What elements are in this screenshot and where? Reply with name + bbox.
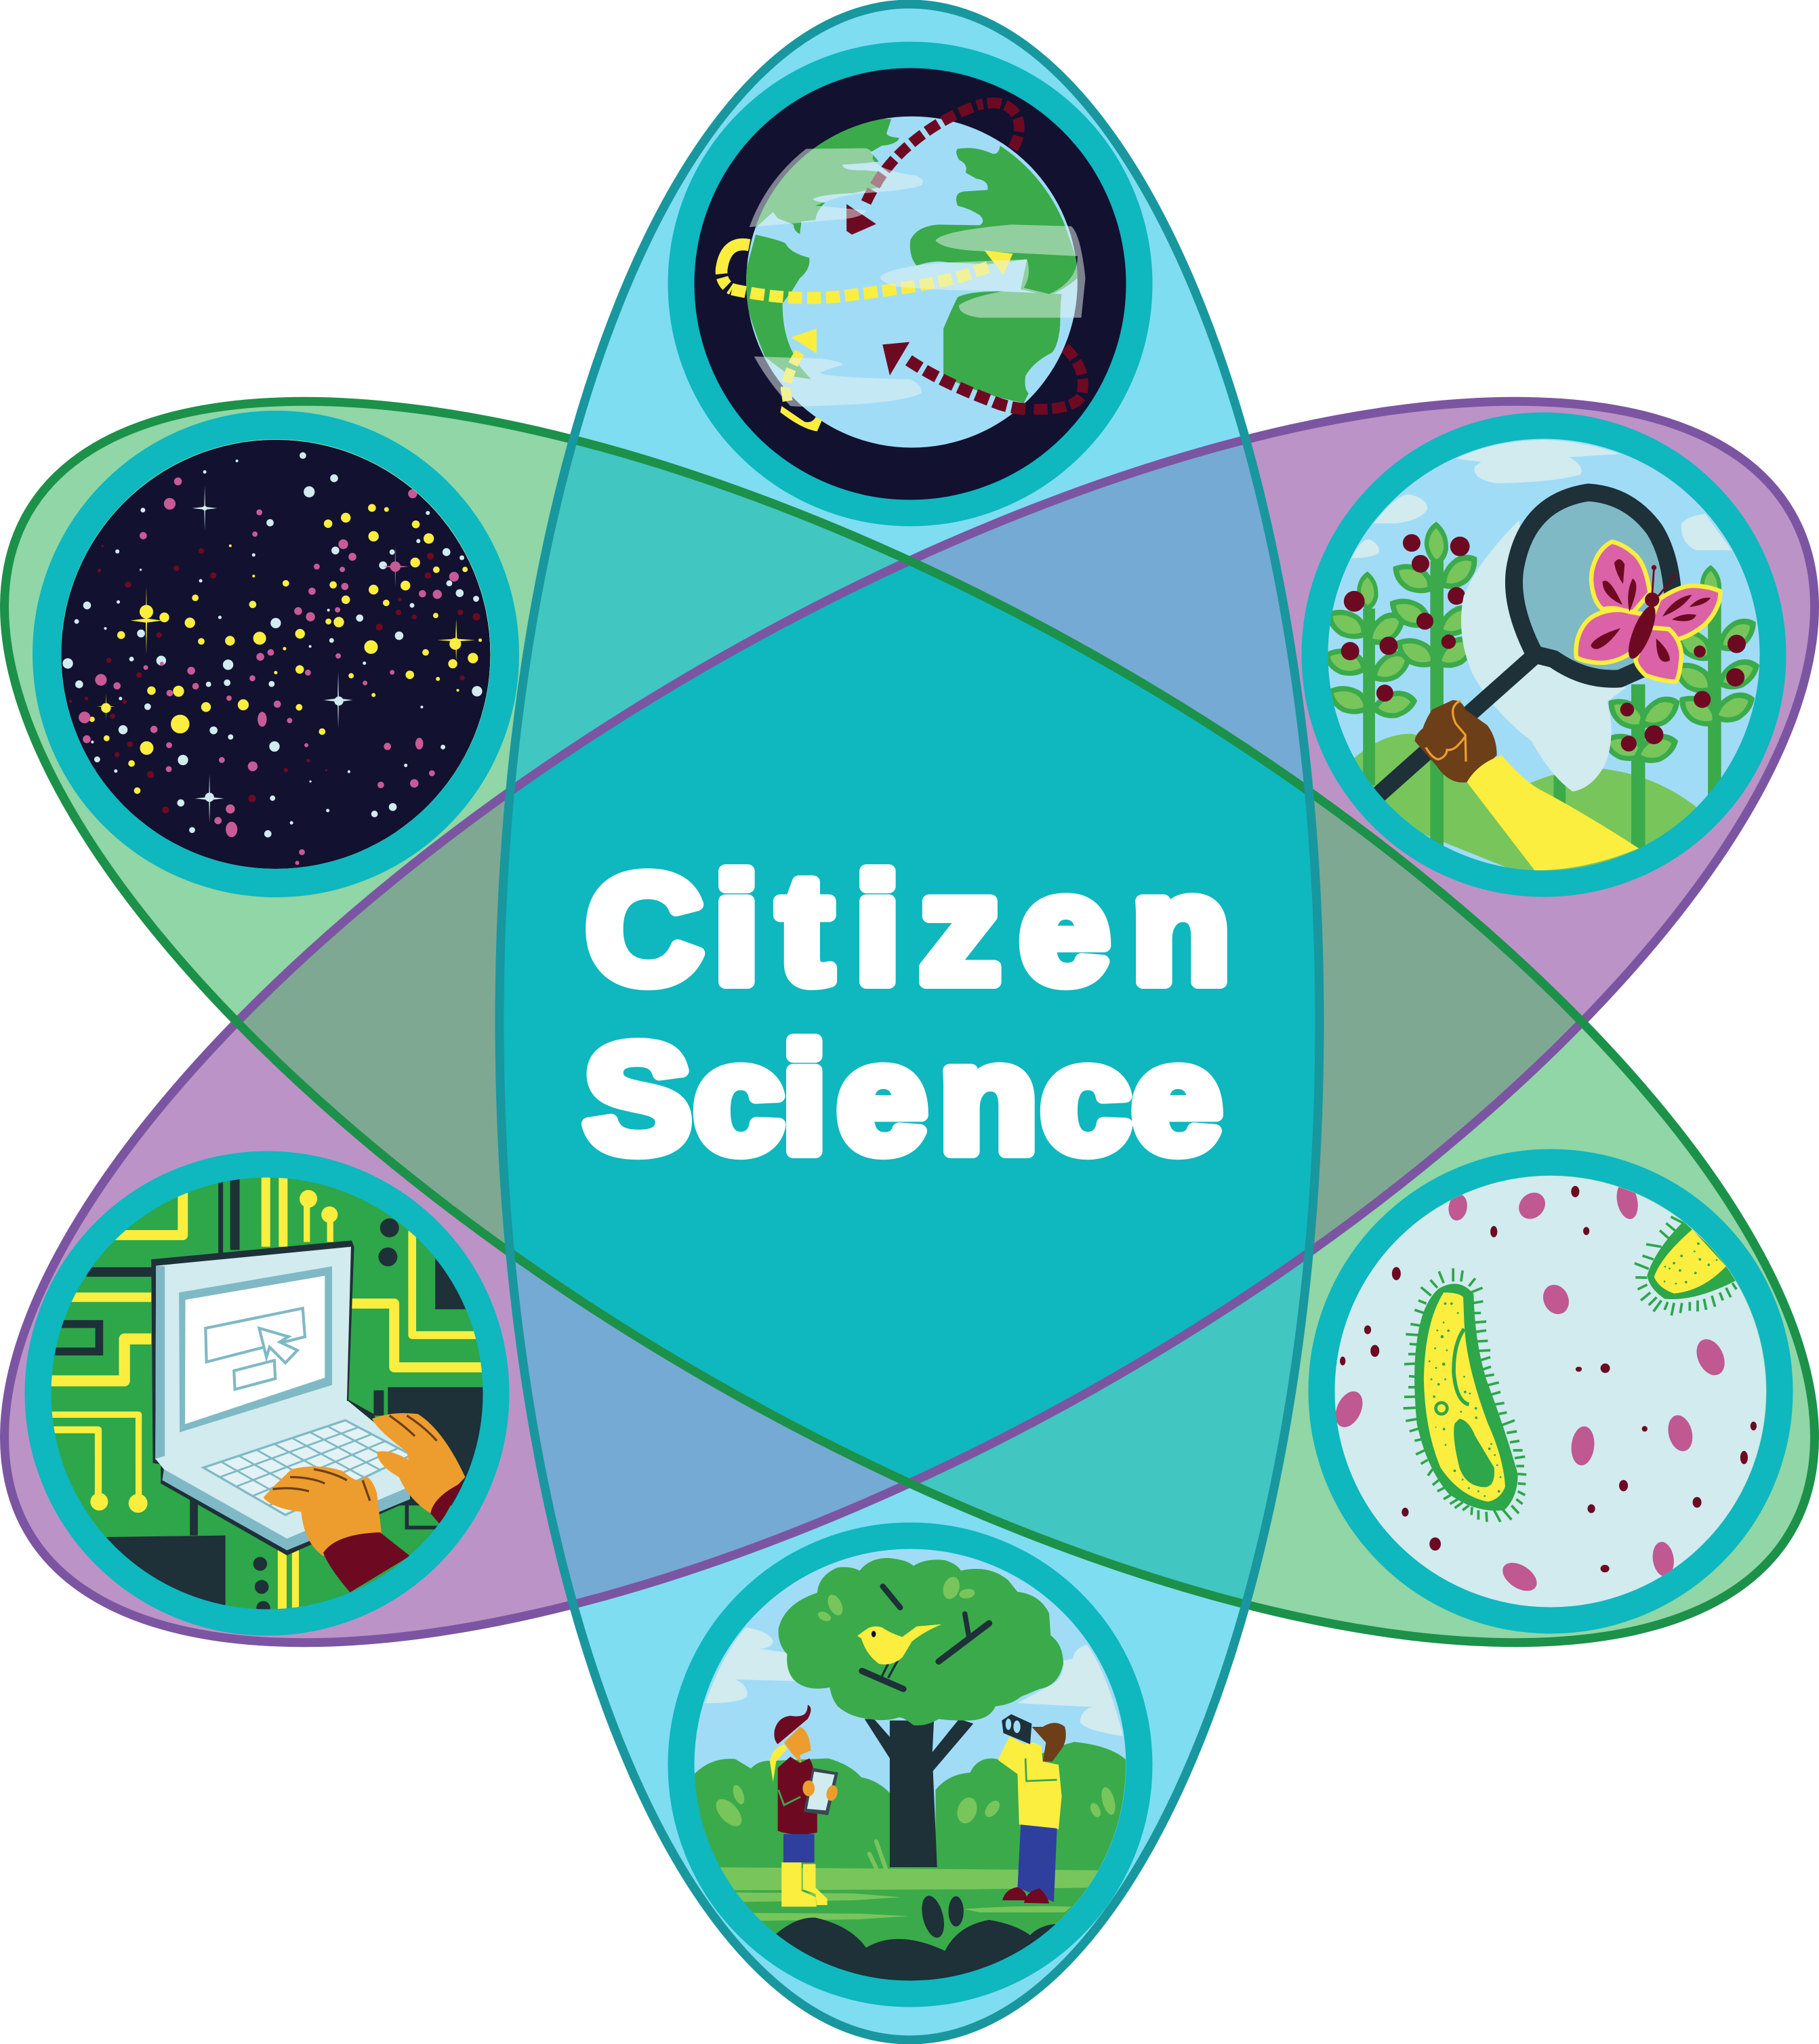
- clouds: [706, 1627, 1123, 1736]
- continents: [743, 117, 1081, 403]
- tree trunk: [865, 1719, 973, 1867]
- yellow stars: [90, 504, 481, 794]
- bushes and ground: [693, 1742, 1135, 1984]
- overlap: green and purple: [243, 800, 1576, 1244]
- hills: [1349, 734, 1699, 880]
- globe ocean: [746, 117, 1078, 448]
- title: Science: [584, 1013, 1222, 1185]
- clouds: [750, 148, 1086, 407]
- maroon particles: [1340, 1186, 1757, 1572]
- arrow tails behind globe: [980, 103, 1083, 409]
- tree crown: [778, 1558, 1063, 1725]
- hands: [263, 1413, 465, 1592]
- ring: laptop: [38, 1164, 496, 1622]
- ring: bird watching: [681, 1536, 1139, 1994]
- pink stars: [79, 478, 458, 865]
- overlap: blue and green: [515, 445, 1304, 1599]
- dashed arrows: [732, 104, 1030, 409]
- pink cells: [1330, 1181, 1730, 1597]
- ring: night sky: [47, 425, 505, 883]
- ring: butterfly: [1315, 426, 1773, 884]
- person with tablet: [770, 1704, 839, 1906]
- net hoop and handle: [1514, 493, 1673, 679]
- title: [584, 844, 1230, 1185]
- panel: bird watching in the park: [693, 1549, 1135, 1998]
- second paramecium: [1635, 1217, 1740, 1315]
- bird: [857, 1624, 942, 1678]
- ring: globe: [681, 55, 1139, 513]
- sleeve: [1467, 755, 1639, 870]
- ring: microbes: [1322, 1162, 1780, 1620]
- overlap: blue and purple: [515, 445, 1304, 1599]
- sky clouds: [1351, 440, 1732, 558]
- overlap: central region: [504, 565, 1315, 1479]
- pale stars: [63, 453, 482, 837]
- panel: night sky with stars: [61, 440, 490, 869]
- paramecium: [1404, 1268, 1526, 1522]
- outline: blue ellipse: [499, 4, 1320, 2040]
- panel: globe with migration arrows: [694, 68, 1127, 501]
- maroon stars: [69, 545, 480, 813]
- laptop: [151, 1240, 411, 1555]
- panel: butterfly and net: [1319, 438, 1765, 880]
- hand: [1415, 700, 1497, 783]
- laptop base: [155, 1401, 410, 1549]
- foreground dark shrubs and leaves: [775, 1894, 1055, 1998]
- panel: microbes under microscope: [1330, 1176, 1766, 1608]
- branches: [883, 1587, 900, 1608]
- butterfly: [1576, 541, 1720, 682]
- plants: [1319, 522, 1765, 849]
- title: Citizen: [586, 844, 1230, 1015]
- net: [1461, 520, 1627, 792]
- arrowheads: [846, 204, 876, 234]
- person with binoculars: [998, 1714, 1066, 1904]
- circuit traces: [49, 1174, 484, 1613]
- petal: blue ellipse fill: [499, 4, 1320, 2040]
- panel: laptop on circuit board: [49, 1174, 487, 1616]
